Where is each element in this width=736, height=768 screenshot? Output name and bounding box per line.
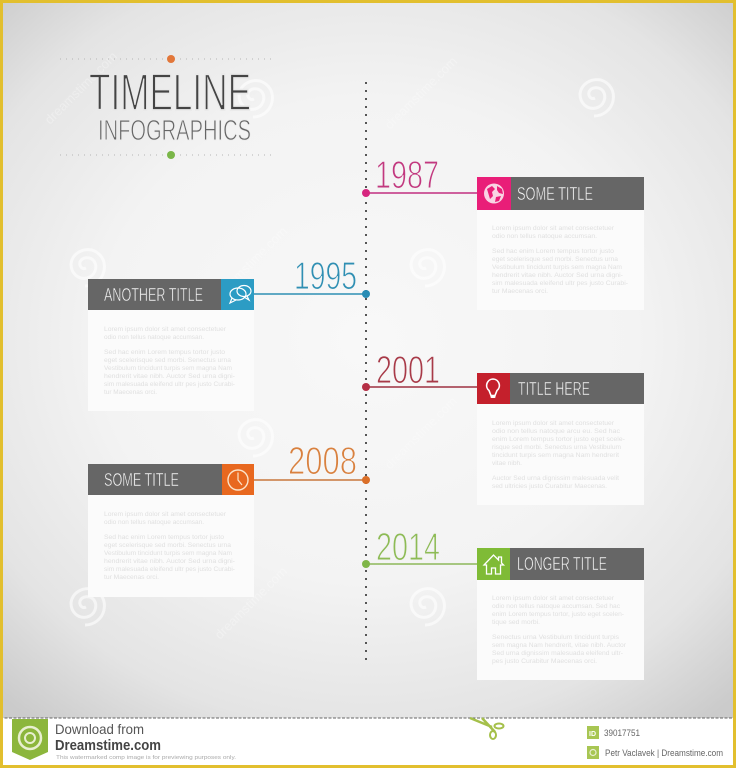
card heading: SOME TITLE xyxy=(517,184,593,204)
card text: Vestibulum tincidunt turpis sem magna Nam xyxy=(492,264,622,271)
card text: Lorem ipsum dolor sit amet consectetuer xyxy=(104,326,227,333)
event 1995 xyxy=(88,255,370,411)
card text: Sed hac enim Lorem tempus tortor justo xyxy=(492,248,614,255)
card text: Senectus urna Vestibulum tincidunt turpis xyxy=(492,634,619,641)
author credit xyxy=(587,746,723,759)
icon: globe xyxy=(477,177,511,210)
card 1987 xyxy=(477,177,644,310)
heading: INFOGRAPHICS: INFOGRAPHICS xyxy=(98,115,251,147)
icon: house xyxy=(477,548,510,580)
card text: tur Maecenas orci. xyxy=(492,288,548,295)
image id xyxy=(587,726,640,739)
card text: Auctor Sed urna dignissim malesuada velit xyxy=(492,475,619,482)
year 1987: 1987 xyxy=(375,154,439,197)
card text: vitae nibh. xyxy=(492,460,522,467)
connector 2014 xyxy=(362,560,477,568)
event 2014 xyxy=(362,526,644,680)
card text: pes justo Curabitur Maecenas orci. xyxy=(492,658,597,665)
download footer xyxy=(0,718,736,768)
timeline axis xyxy=(365,82,367,662)
card text xyxy=(492,420,625,490)
card text: hendrerit vitae nibh. Auctor Sed urna digni- xyxy=(104,558,235,565)
watermark text: dreamstime.com xyxy=(382,54,460,132)
title block xyxy=(60,55,273,159)
card text: enim Lorem tempus tortor justo eget scele- xyxy=(492,436,625,443)
card text: tique sed morbi. xyxy=(492,619,540,626)
year 2014: 2014 xyxy=(376,526,440,569)
image id: ID xyxy=(589,731,596,738)
card text: tincidunt turpis sem magna Nam hendrerit xyxy=(492,452,619,459)
connector 1987 xyxy=(362,189,477,197)
footer text xyxy=(55,721,237,761)
card text: hendrerit vitae nibh. Auctor Sed urna digni- xyxy=(104,373,235,380)
card text: hendrerit vitae nibh. Auctor Sed urna digni- xyxy=(492,272,623,279)
watermark text: dreamstime.com xyxy=(552,564,630,642)
title ornament bottom xyxy=(60,151,273,159)
card text: tur Maecenas orci. xyxy=(104,389,157,396)
watermark text: dreamstime.com xyxy=(42,49,120,127)
watermark text: dreamstime.com xyxy=(212,564,290,642)
connector 2001 xyxy=(362,383,477,391)
card text: sem magna Nam hendrerit, vitae nibh. Auctor xyxy=(492,642,627,649)
card text xyxy=(492,225,628,295)
card text: enim Lorem tempus tortor, justo eget scelen- xyxy=(492,611,624,618)
card text xyxy=(492,595,627,665)
card text: odio non tellus natoque accumsan. Sed hac xyxy=(492,603,621,610)
card text: Sed hac enim Lorem tempus tortor justo xyxy=(104,534,224,541)
card text: risque sed morbi. Senectus urna Vestibulum xyxy=(492,444,621,451)
event 2001 xyxy=(362,349,644,505)
card text: Lorem ipsum dolor sit amet consectetuer xyxy=(492,225,615,232)
year 2001: 2001 xyxy=(376,349,440,392)
watermark spirals xyxy=(71,80,613,625)
icon: light bulb xyxy=(477,373,510,404)
card text: tur Maecenas orci. xyxy=(104,574,159,581)
card text: Lorem ipsum dolor sit amet consectetuer xyxy=(492,595,615,602)
card text: eget scelerisque sed morbi. Senectus urna xyxy=(104,357,231,364)
card 2014 xyxy=(477,548,644,680)
card text: odio non tellus natoque accumsan. xyxy=(104,334,204,341)
card text: Sed hac enim Lorem tempus tortor justo xyxy=(104,349,225,356)
card text: sim malesuada eleifend ultr pes justo Curabi- xyxy=(492,280,628,287)
card 2008 xyxy=(88,464,254,597)
watermark text: dreamstime.com xyxy=(382,394,460,472)
connector 2008 xyxy=(254,476,370,484)
card text: sed ultricies justo Curabitur Maecenas. xyxy=(492,483,607,490)
connector 1995 xyxy=(254,290,370,298)
footer text: Dreamstime.com xyxy=(55,737,161,754)
card 1995 xyxy=(88,279,254,411)
card text: odio non tellus natoque arcu eu. Sed hac xyxy=(492,428,621,435)
author credit: Petr Vaclavek | Dreamstime.com xyxy=(605,748,723,758)
watermark text xyxy=(42,49,630,642)
card text xyxy=(104,326,235,396)
card heading: SOME TITLE xyxy=(104,470,179,490)
card text: sim malesuada eleifend ultr pes justo Curabi- xyxy=(104,381,235,388)
watermark text: dreamstime.com xyxy=(212,224,290,302)
icon: dreamstime shield xyxy=(12,719,48,760)
year 1995: 1995 xyxy=(294,255,357,298)
title ornament top xyxy=(60,55,273,63)
icon: chat bubbles xyxy=(221,279,254,310)
card text: Vestibulum tincidunt turpis sem magna Nam xyxy=(104,365,232,372)
icon: clock xyxy=(222,464,254,495)
card text: odio non tellus natoque accumsan. xyxy=(492,233,597,240)
card text: eget scelerisque sed morbi. Senectus urna xyxy=(104,542,231,549)
card text: sim malesuada eleifend ultr pes justo Curabi- xyxy=(104,566,235,573)
event 1987 xyxy=(362,154,644,310)
card text: odio non tellus natoque accumsan. xyxy=(104,519,204,526)
card text: Lorem ipsum dolor sit amet consectetuer xyxy=(492,420,615,427)
card text: Vestibulum tincidunt turpis sem magna Nam xyxy=(104,550,232,557)
card 2001 xyxy=(477,373,644,505)
footer text: This watermarked comp image is for previewing purposes only. xyxy=(56,755,237,761)
watermark text: dreamstime.com xyxy=(552,224,630,302)
card text: Lorem ipsum dolor sit amet consectetuer xyxy=(104,511,227,518)
event 2008 xyxy=(88,440,370,597)
card text: eget scelerisque sed morbi. Senectus urna xyxy=(492,256,618,263)
heading: TIMELINE: TIMELINE xyxy=(89,64,251,122)
card text xyxy=(104,511,235,581)
footer text: Download from xyxy=(55,721,144,737)
card heading: ANOTHER TITLE xyxy=(104,285,203,305)
card heading: LONGER TITLE xyxy=(517,554,607,574)
image id: 39017751 xyxy=(604,728,640,738)
year 2008: 2008 xyxy=(288,440,357,483)
icon: scissors xyxy=(470,718,504,739)
card heading: TITLE HERE xyxy=(518,379,590,399)
card text: Sed urna dignissim malesuada eleifend ultr- xyxy=(492,650,623,657)
